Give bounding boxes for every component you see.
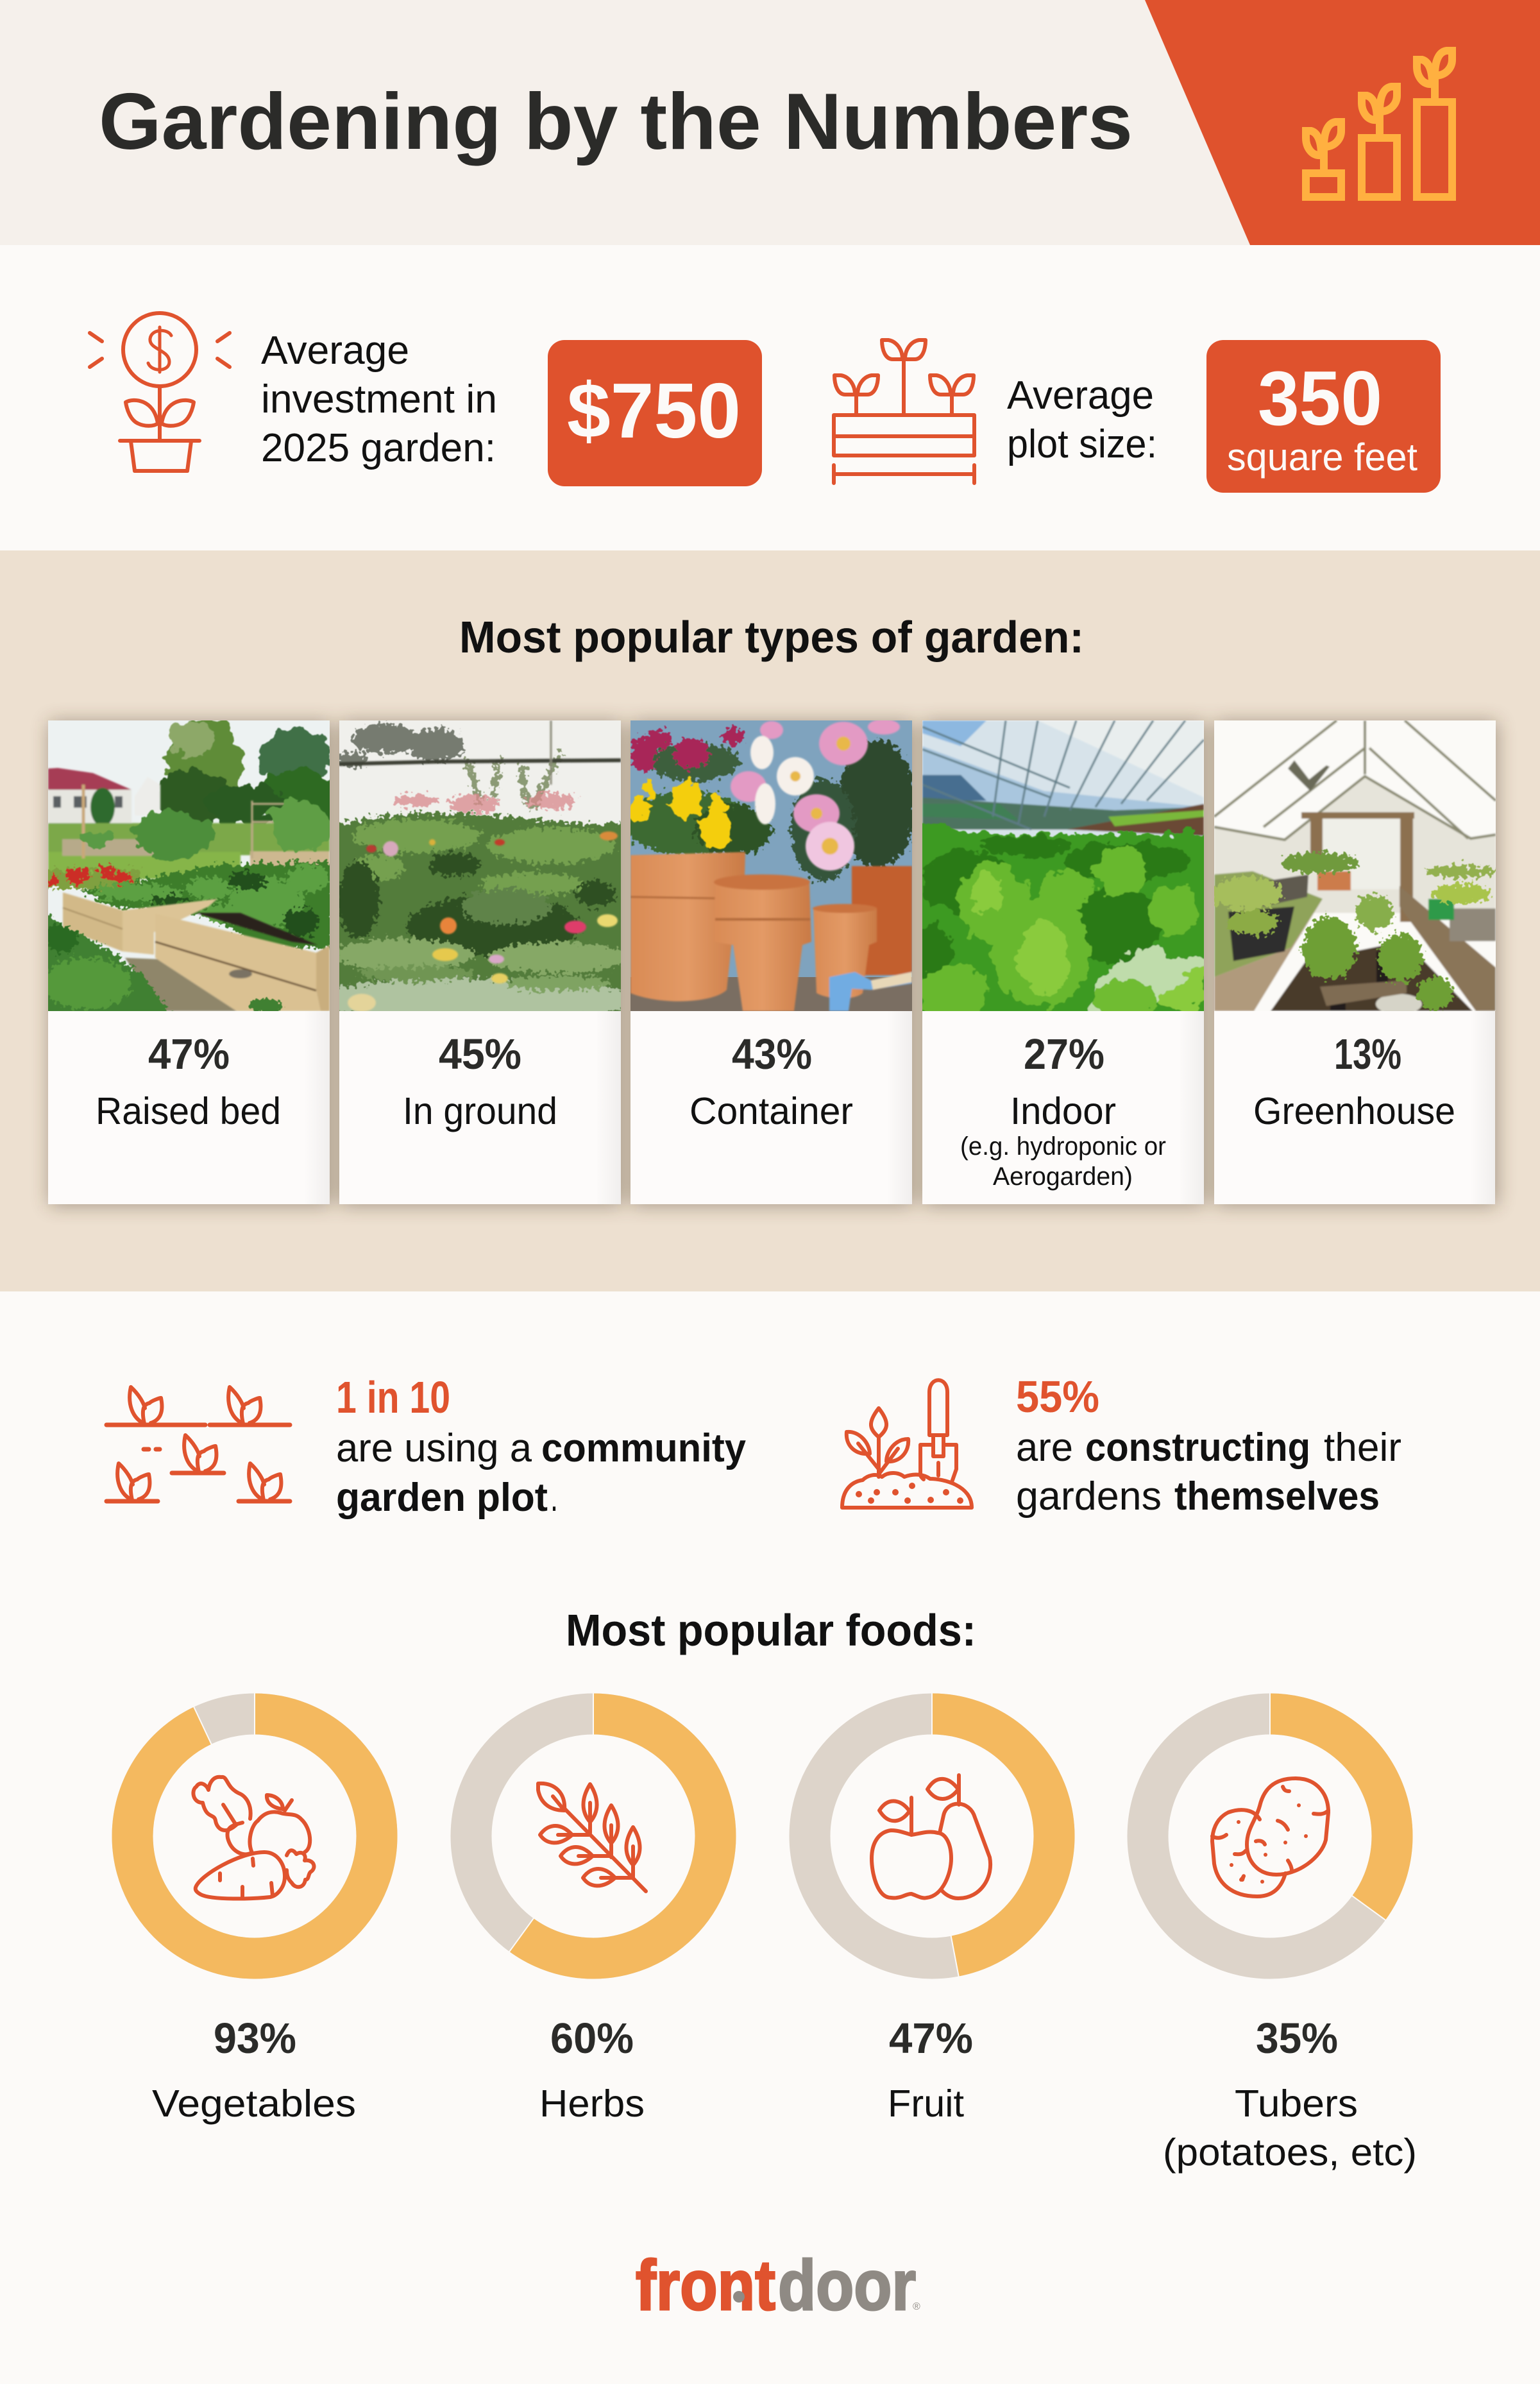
stat: 47% fruit bbox=[888, 2014, 973, 2125]
stat: 13% greenhouse: Greenhouse bbox=[1253, 1090, 1455, 1132]
stat: 13% greenhouse bbox=[1253, 1030, 1455, 1132]
icon: money plant bbox=[90, 313, 230, 471]
stat: 27% indoor: 27% bbox=[1024, 1030, 1104, 1078]
stat: 93% vegetables: 93% bbox=[214, 2014, 296, 2063]
logo: frontdoor bbox=[636, 2246, 920, 2325]
plot size text: plot size: bbox=[1007, 422, 1157, 466]
title: Gardening by the Numbers bbox=[99, 78, 1133, 166]
stat: 43% container: 43% bbox=[732, 1030, 812, 1078]
stat: 45% in ground bbox=[403, 1030, 557, 1132]
stat: 27% indoor bbox=[960, 1030, 1166, 1191]
callout: $750: $750 bbox=[567, 367, 741, 454]
investment text bbox=[261, 328, 497, 470]
self-built text: 55% bbox=[1016, 1372, 1099, 1422]
photo: in ground bbox=[339, 720, 621, 1011]
card: in ground bbox=[339, 720, 621, 1204]
stat: 93% vegetables: Vegetables bbox=[152, 2082, 356, 2125]
stat: 60% herbs bbox=[539, 2014, 645, 2125]
stat: 43% container bbox=[690, 1030, 853, 1132]
investment text: 2025 garden: bbox=[261, 426, 496, 470]
community text: . bbox=[550, 1476, 558, 1520]
card: container bbox=[624, 719, 916, 1204]
icon: sprouts on plots bbox=[106, 1387, 290, 1501]
community text: community bbox=[541, 1426, 746, 1470]
self-built text bbox=[1016, 1372, 1401, 1519]
logo: frontdoor: door bbox=[778, 2246, 916, 2325]
icon: apple and pear bbox=[872, 1775, 990, 1898]
stat: 60% herbs: 60% bbox=[550, 2014, 634, 2063]
callout: 350 square feet: square feet bbox=[1227, 436, 1417, 479]
investment text: investment in bbox=[261, 377, 497, 421]
stat: 35% tubers: (potatoes, etc) bbox=[1163, 2131, 1417, 2174]
panel: average plot size bbox=[834, 340, 1441, 493]
stat: 45% in ground: In ground bbox=[403, 1090, 557, 1132]
logo: frontdoor: ® bbox=[913, 2301, 920, 2312]
stat: 13% greenhouse: 13% bbox=[1334, 1030, 1401, 1078]
photo: greenhouse bbox=[1208, 714, 1503, 1019]
donut chart: 60% bbox=[471, 1692, 716, 1958]
callout: 350 square feet bbox=[1206, 340, 1441, 493]
community text bbox=[336, 1372, 746, 1520]
stat: 43% container: Container bbox=[690, 1090, 853, 1132]
self-built text: themselves bbox=[1174, 1474, 1380, 1519]
callout: $750 bbox=[548, 340, 762, 486]
stat: 35% tubers: 35% bbox=[1256, 2014, 1338, 2063]
stat: 27% indoor: Aerogarden) bbox=[993, 1162, 1133, 1191]
panel: tubers donut bbox=[1148, 1692, 1417, 2174]
donut chart: 93% bbox=[132, 1692, 377, 1958]
panel: self-built gardens stat bbox=[842, 1372, 1401, 1519]
stat: 47% raised bed bbox=[96, 1030, 281, 1132]
stat: 60% herbs: Herbs bbox=[539, 2082, 645, 2125]
plot size text: Average bbox=[1007, 373, 1154, 418]
stat: 93% vegetables bbox=[152, 2014, 356, 2125]
stat: 35% tubers: Tubers bbox=[1235, 2082, 1358, 2125]
stat: 35% tubers bbox=[1163, 2014, 1417, 2174]
logo: frontdoor: front bbox=[636, 2246, 775, 2325]
stat: 47% raised bed: 47% bbox=[148, 1030, 230, 1078]
community text: 1 in 10 bbox=[336, 1372, 450, 1422]
icon: growing plants bar chart bbox=[1306, 51, 1452, 197]
self-built text: their bbox=[1324, 1426, 1401, 1470]
stat: 47% fruit: Fruit bbox=[888, 2082, 964, 2125]
card: raised bed bbox=[42, 717, 346, 1204]
photo: indoor bbox=[913, 720, 1214, 1022]
stat: 47% raised bed: Raised bed bbox=[96, 1090, 281, 1132]
investment text: Average bbox=[261, 328, 409, 373]
header banner bbox=[0, 0, 1540, 245]
community text: garden plot bbox=[336, 1476, 548, 1520]
panel: types of garden bbox=[0, 550, 1540, 1291]
stat: 27% indoor: (e.g. hydroponic or bbox=[960, 1132, 1166, 1161]
community text: are using a bbox=[336, 1426, 532, 1470]
panel: community garden stat bbox=[106, 1372, 746, 1520]
panel: herbs donut bbox=[471, 1692, 716, 2125]
self-built text: are bbox=[1016, 1426, 1073, 1470]
plot size text bbox=[1007, 373, 1157, 466]
panel: average investment bbox=[90, 313, 762, 486]
photo: container bbox=[624, 719, 916, 1011]
panel: vegetables donut bbox=[132, 1692, 377, 2125]
card: greenhouse bbox=[1208, 714, 1503, 1204]
icon: vegetables bbox=[193, 1777, 314, 1899]
panel: fruit donut bbox=[809, 1692, 1054, 2125]
stat: 27% indoor: Indoor bbox=[1010, 1090, 1116, 1132]
card: indoor bbox=[913, 720, 1214, 1204]
photo: raised bed bbox=[48, 720, 330, 1011]
self-built text: gardens bbox=[1016, 1474, 1162, 1519]
icon: raised bed with plants bbox=[834, 340, 974, 483]
heading: types of garden: Most popular types of garden: bbox=[459, 612, 1084, 662]
donut chart: 35% bbox=[1148, 1692, 1392, 1958]
self-built text: constructing bbox=[1085, 1426, 1310, 1470]
heading: popular foods: Most popular foods: bbox=[566, 1605, 976, 1655]
stat: 47% fruit: 47% bbox=[889, 2014, 973, 2063]
icon: herb sprig bbox=[538, 1784, 646, 1891]
donut chart: 47% bbox=[809, 1692, 1054, 1977]
stat: 45% in ground: 45% bbox=[439, 1030, 521, 1078]
icon: potatoes bbox=[1212, 1778, 1328, 1896]
callout: 350 square feet: 350 bbox=[1258, 355, 1382, 441]
icon: trowel and plant bbox=[842, 1380, 972, 1508]
